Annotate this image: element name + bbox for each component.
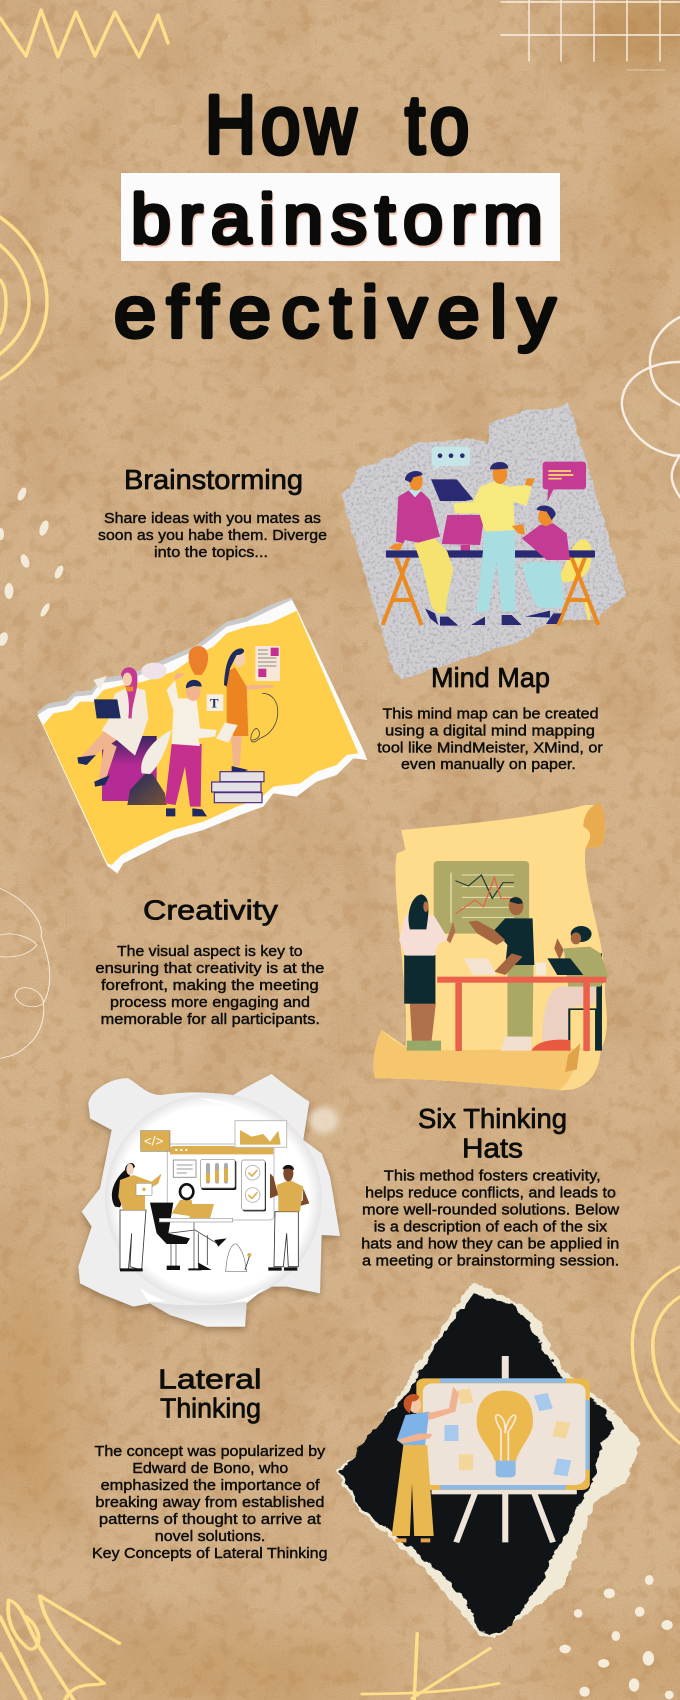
illustration: team on torn white paper	[78, 1074, 340, 1330]
illustration: creative team on yellow torn paper	[37, 597, 367, 873]
text: creativity description: ensuring that creativity is at the	[95, 961, 324, 977]
title	[114, 79, 566, 353]
text: lateral thinking description: Edward de Bono, who	[132, 1461, 288, 1477]
heading: Lateral Thinking: Thinking	[160, 1393, 261, 1424]
text: lateral thinking description: breaking away from established	[95, 1495, 324, 1511]
decoration: thin white loops left	[0, 888, 50, 1058]
text: brainstorming description: into the topics...	[154, 545, 268, 561]
heading: Brainstorming: Brainstorming	[124, 464, 303, 495]
heading: Creativity: Creativity	[143, 894, 278, 925]
decoration: white squiggle right	[622, 317, 680, 497]
text: six thinking hats description: a meeting or brainstorming session.	[362, 1253, 619, 1269]
document	[255, 646, 280, 681]
decoration: white dots bottom right	[559, 1575, 674, 1699]
heading: Six Thinking Hats: Six Thinking	[418, 1103, 567, 1134]
text card: T	[210, 696, 219, 710]
heading: Lateral Thinking: Lateral	[158, 1363, 262, 1394]
text: mind map description	[377, 706, 603, 773]
person seated	[512, 505, 570, 624]
decoration: yellow zigzag top left	[0, 10, 168, 57]
decoration: yellow arcs right	[632, 1267, 680, 1443]
code tag box: </>	[144, 1133, 163, 1148]
code tag box	[141, 1131, 170, 1151]
person centre with laptop	[431, 462, 535, 625]
person left	[388, 471, 458, 626]
illustration: lightbulb presentation on torn black paper	[336, 1282, 641, 1638]
text: brainstorming description: soon as you habe them. Diverge	[98, 528, 327, 544]
decoration: yellow scribble bottom left	[0, 1596, 119, 1700]
title line: effectively: effectively	[114, 273, 566, 353]
chart board	[434, 861, 529, 934]
text: mind map description: tool like MindMeister, XMind, or	[377, 740, 603, 756]
heading: Lateral Thinking	[158, 1363, 262, 1424]
text: lateral thinking description: novel solutions.	[155, 1529, 265, 1545]
sticky notes	[445, 1389, 571, 1476]
text: lateral thinking description: emphasized the importance of	[101, 1478, 321, 1494]
text: mind map description: This mind map can be created	[382, 706, 598, 722]
illustration: team at table on grey torn paper	[342, 403, 627, 679]
text: lateral thinking description	[92, 1444, 328, 1562]
seated woman with laptop	[150, 1184, 233, 1270]
woman presenting	[399, 894, 455, 1051]
lightbulb and thought bubble	[93, 646, 208, 690]
text: lateral thinking description: Key Concepts of Lateral Thinking	[92, 1546, 328, 1562]
text: six thinking hats description: hats and how they can be applied in	[361, 1236, 619, 1252]
speech bubbles	[432, 447, 586, 502]
text: six thinking hats description: This method fosters creativity,	[384, 1168, 601, 1184]
decoration: yellow star strokes bottom	[362, 1633, 499, 1700]
heading: Six Thinking Hats: Hats	[462, 1133, 523, 1164]
text: six thinking hats description: more well-rounded solutions. Below	[362, 1202, 620, 1218]
text: creativity description: The visual aspect is key to	[117, 944, 303, 960]
text: six thinking hats description	[361, 1168, 620, 1269]
title line: How to: How to	[205, 79, 474, 171]
text card	[207, 694, 223, 711]
text: mind map description: even manually on paper.	[401, 757, 576, 773]
cat and flower	[226, 1244, 251, 1272]
text: creativity description: process more engaging and	[110, 995, 310, 1011]
person seated with laptop	[77, 667, 157, 801]
man at table	[468, 897, 534, 1051]
decoration: white grid top right	[501, 0, 680, 70]
easel	[432, 1356, 577, 1542]
heading: Mind Map: Mind Map	[431, 662, 550, 693]
stack of books	[212, 772, 264, 803]
man right	[268, 1165, 309, 1271]
lightbulb	[477, 1391, 533, 1477]
text: brainstorming description	[98, 511, 327, 561]
title highlight: brainstorm: brainstorm	[131, 180, 551, 258]
text: creativity description	[95, 944, 324, 1028]
text: six thinking hats description: helps reduce conflicts, and leads to	[365, 1185, 616, 1201]
text: lateral thinking description: The concept was popularized by	[94, 1444, 326, 1460]
text: brainstorming description: Share ideas with you mates as	[104, 511, 321, 527]
woman left with tablet	[112, 1163, 162, 1271]
presenter	[392, 1387, 459, 1542]
text: mind map description: using a digital mind mapping	[385, 723, 595, 739]
seated person with laptop	[531, 926, 608, 1051]
vase and feather	[127, 730, 172, 805]
table and legs	[383, 515, 598, 625]
person centre with arm raised	[165, 673, 217, 816]
illustration: meeting on paper scroll	[373, 803, 608, 1090]
table	[437, 958, 606, 1051]
presentation board	[416, 1378, 590, 1490]
text: creativity description: memorable for all participants.	[101, 1012, 320, 1028]
decoration: white brush marks left	[0, 486, 65, 647]
dashboard	[167, 1144, 274, 1220]
text: creativity description: forefront, making the meeting	[101, 978, 319, 994]
area chart card	[235, 1121, 287, 1147]
text: six thinking hats description: is a description of each of the six	[374, 1219, 608, 1235]
heading: Six Thinking Hats	[418, 1103, 567, 1164]
text: lateral thinking description: patterns of thought to arrive at	[99, 1512, 321, 1528]
person right on books	[216, 648, 273, 773]
decoration: yellow concentric arcs left	[0, 217, 47, 379]
